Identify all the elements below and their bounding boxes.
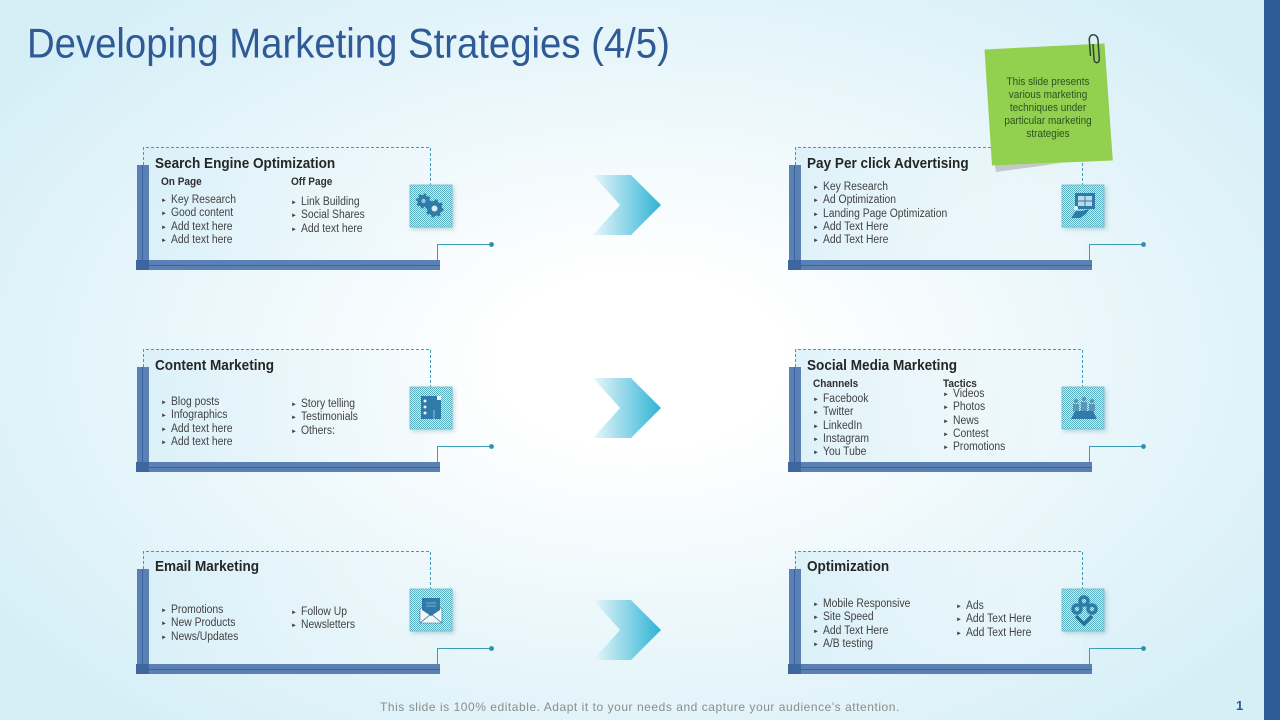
list: ppc items: ► bbox=[813, 212, 819, 218]
footer note: This slide is 100% editable. Adapt it to your needs and capture your audience's attention. bbox=[380, 700, 900, 714]
heading: search engine optimization: Search Engine Optimization bbox=[155, 155, 335, 172]
list: content formats bbox=[291, 398, 358, 437]
list: ppc items: ► bbox=[813, 225, 819, 231]
column: channels: Twitter bbox=[823, 406, 854, 418]
list: campaigns: ► bbox=[161, 635, 167, 641]
column: off page bbox=[291, 175, 365, 235]
column: off page: Link Building bbox=[301, 196, 360, 208]
column: off page: ► bbox=[291, 227, 297, 233]
list: ppc items: Ad Optimization bbox=[823, 194, 896, 206]
list: content types: Add text here bbox=[171, 423, 233, 435]
list: campaigns: ► bbox=[161, 621, 167, 627]
column: on page: ► bbox=[161, 238, 167, 244]
list: ppc items: ► bbox=[813, 185, 819, 191]
list: site optimization: Mobile Responsive bbox=[823, 598, 910, 610]
column: tactics: Contest bbox=[953, 428, 989, 440]
column: off page: ► bbox=[291, 213, 297, 219]
icon: linked cycle bbox=[1073, 597, 1096, 624]
list: ad optimization: ► bbox=[956, 617, 962, 623]
heading: social media marketing: Social Media Marketing bbox=[807, 357, 957, 374]
list: content formats: Others: bbox=[301, 425, 335, 437]
heading: optimization: Optimization bbox=[807, 558, 889, 575]
column: channels: ► bbox=[813, 410, 819, 416]
column: on page: ► bbox=[161, 211, 167, 217]
heading: content marketing: Content Marketing bbox=[155, 357, 274, 374]
column: on page bbox=[161, 175, 236, 246]
column: off page: Social Shares bbox=[301, 209, 365, 221]
list: site optimization: ► bbox=[813, 602, 819, 608]
list: campaigns: News/Updates bbox=[171, 631, 239, 643]
column: on page: Add text here bbox=[171, 234, 233, 246]
list: content types: ► bbox=[161, 400, 167, 406]
panel: optimization bbox=[788, 551, 1146, 674]
panel: pay per click advertising bbox=[788, 147, 1146, 270]
list: ppc items: Key Research bbox=[823, 181, 888, 193]
list: ad optimization: Add Text Here bbox=[966, 613, 1031, 625]
column: tactics: ► bbox=[943, 445, 949, 451]
column: off page: Add text here bbox=[301, 223, 363, 235]
icon: hand with screen bbox=[1071, 193, 1095, 218]
list: content formats: ► bbox=[291, 429, 297, 435]
icon: gears bbox=[417, 194, 442, 216]
column: on page: Add text here bbox=[171, 221, 233, 233]
icon: people group bbox=[1071, 397, 1097, 419]
column: channels: ► bbox=[813, 424, 819, 430]
list: follow up: Follow Up bbox=[301, 606, 347, 618]
note text: various marketing bbox=[1009, 90, 1088, 101]
list: content formats: ► bbox=[291, 415, 297, 421]
panel: search engine optimization bbox=[136, 147, 494, 270]
heading: email marketing: Email Marketing bbox=[155, 558, 259, 575]
right side band bbox=[1264, 0, 1280, 720]
column: channels: ► bbox=[813, 450, 819, 456]
icon: paperclip bbox=[1089, 35, 1099, 63]
list: ppc items: Add Text Here bbox=[823, 221, 888, 233]
note text: This slide presents bbox=[1007, 77, 1089, 88]
list: site optimization: ► bbox=[813, 642, 819, 648]
column: tactics: Tactics bbox=[943, 377, 977, 390]
list: content types: ► bbox=[161, 427, 167, 433]
list: campaigns: Promotions bbox=[171, 604, 224, 616]
column: on page: ► bbox=[161, 225, 167, 231]
note text: strategies bbox=[1026, 129, 1070, 140]
column: on page: On Page bbox=[161, 175, 202, 188]
list: ppc items: ► bbox=[813, 238, 819, 244]
list: site optimization: Add Text Here bbox=[823, 625, 888, 637]
list: ad optimization bbox=[956, 600, 1031, 639]
list: campaigns bbox=[161, 604, 239, 643]
list: follow up: ► bbox=[291, 623, 297, 629]
column: tactics: ► bbox=[943, 405, 949, 411]
column: tactics: ► bbox=[943, 392, 949, 398]
list: content types: ► bbox=[161, 413, 167, 419]
list: ppc items: Add Text Here bbox=[823, 234, 888, 246]
list: campaigns: ► bbox=[161, 608, 167, 614]
list: content types: Blog posts bbox=[171, 396, 220, 408]
list: site optimization: ► bbox=[813, 615, 819, 621]
arrow: row 3 bbox=[593, 600, 661, 660]
page number: 1 bbox=[1236, 698, 1243, 713]
panel: content marketing bbox=[136, 349, 494, 472]
list: ad optimization: Add Text Here bbox=[966, 627, 1031, 639]
column: tactics: ► bbox=[943, 432, 949, 438]
panel: social media marketing bbox=[788, 349, 1146, 472]
column: off page: ► bbox=[291, 200, 297, 206]
column: tactics: News bbox=[953, 415, 979, 427]
list: ppc items: ► bbox=[813, 198, 819, 204]
list: content formats: Story telling bbox=[301, 398, 355, 410]
list: follow up bbox=[291, 606, 356, 631]
icon: document list bbox=[421, 396, 441, 419]
list: content formats: ► bbox=[291, 402, 297, 408]
title: Developing Marketing Strategies (4/5) bbox=[27, 20, 670, 67]
column: tactics: Promotions bbox=[953, 441, 1006, 453]
list: site optimization bbox=[813, 598, 910, 650]
list: ppc items bbox=[813, 181, 947, 246]
column: channels: LinkedIn bbox=[823, 420, 862, 432]
list: follow up: ► bbox=[291, 610, 297, 616]
column: channels: Facebook bbox=[823, 393, 869, 405]
list: follow up: Newsletters bbox=[301, 619, 356, 631]
column: channels bbox=[813, 377, 869, 458]
column: tactics: Videos bbox=[953, 388, 985, 400]
column: channels: Channels bbox=[813, 377, 858, 390]
arrow: row 2 bbox=[593, 378, 661, 438]
note text bbox=[1004, 77, 1092, 140]
panel: email marketing bbox=[136, 551, 494, 674]
list: ad optimization: ► bbox=[956, 631, 962, 637]
sticky note bbox=[984, 35, 1113, 172]
heading: pay per click advertising: Pay Per click Advertising bbox=[807, 155, 969, 172]
list: site optimization: A/B testing bbox=[823, 638, 873, 650]
list: content formats: Testimonials bbox=[301, 411, 358, 423]
list: ad optimization: ► bbox=[956, 604, 962, 610]
column: channels: Instagram bbox=[823, 433, 869, 445]
icon: envelope bbox=[420, 598, 442, 623]
list: site optimization: ► bbox=[813, 629, 819, 635]
column: channels: You Tube bbox=[823, 446, 866, 458]
column: on page: Key Research bbox=[171, 194, 236, 206]
list: content types: Infographics bbox=[171, 409, 228, 421]
arrow: row 1 bbox=[593, 175, 661, 235]
column: tactics: ► bbox=[943, 419, 949, 425]
column: channels: ► bbox=[813, 397, 819, 403]
note text: particular marketing bbox=[1004, 116, 1092, 127]
list: site optimization: Site Speed bbox=[823, 611, 874, 623]
column: tactics: Photos bbox=[953, 401, 986, 413]
column: on page: ► bbox=[161, 198, 167, 204]
column: on page: Good content bbox=[171, 207, 233, 219]
note text: techniques under bbox=[1010, 103, 1087, 114]
list: ppc items: Landing Page Optimization bbox=[823, 208, 947, 220]
list: content types: Add text here bbox=[171, 436, 233, 448]
column: channels: ► bbox=[813, 437, 819, 443]
list: content types: ► bbox=[161, 440, 167, 446]
column: tactics bbox=[943, 377, 1006, 453]
list: content types bbox=[161, 396, 233, 448]
list: campaigns: New Products bbox=[171, 617, 236, 629]
list: ad optimization: Ads bbox=[966, 600, 984, 612]
column: off page: Off Page bbox=[291, 175, 332, 188]
